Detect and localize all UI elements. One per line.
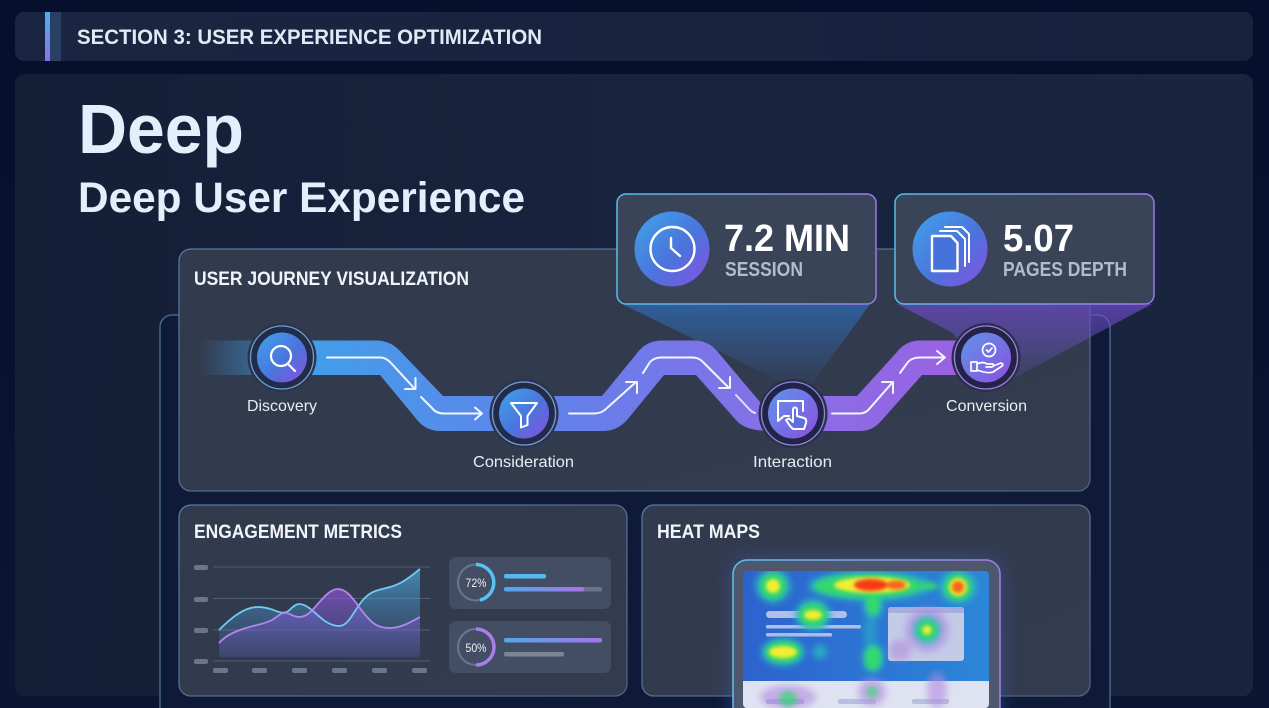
icon: clock [650, 227, 694, 271]
stat value: pages depth: 5.07 [1003, 218, 1074, 260]
heat blobs [755, 569, 977, 708]
percent: 72: 72% [466, 576, 487, 590]
lower page edge [0, 696, 1269, 708]
label: consideration: Consideration [473, 454, 574, 471]
node: conversion [946, 323, 1027, 415]
icon: magnifier [271, 346, 295, 371]
icon: pages [932, 227, 969, 271]
node: interaction [753, 379, 832, 471]
stat value: session: 7.2 MIN [724, 218, 850, 260]
node: discovery [247, 323, 317, 415]
percent: 50: 50% [466, 641, 487, 655]
label: discovery: Discovery [247, 398, 317, 415]
back panel [160, 315, 1110, 708]
stat label: session: SESSION [725, 259, 803, 281]
metric card: 72% [449, 557, 611, 609]
label: interaction: Interaction [753, 454, 832, 471]
heat map monitor [733, 560, 1000, 708]
metric card: 50% [449, 621, 611, 673]
stat card: session [617, 194, 876, 304]
stat card: pages depth [895, 194, 1154, 304]
journey ribbon [198, 340, 986, 431]
subtitle: Deep User Experience [78, 174, 525, 222]
icon: hand with check [971, 344, 1003, 373]
section heading: SECTION 3: USER EXPERIENCE OPTIMIZATION [77, 26, 542, 49]
icon: funnel [511, 403, 537, 428]
icon: touch screen [778, 401, 806, 429]
page mock content [766, 607, 964, 704]
section header bar [15, 12, 1253, 61]
journey arrows [327, 351, 945, 420]
panel heading: user journey: USER JOURNEY VISUALIZATION [194, 269, 469, 290]
panel: engagement metrics [179, 505, 627, 696]
title [78, 90, 525, 222]
label: conversion: Conversion [946, 398, 1027, 415]
title: Deep [78, 90, 244, 168]
monitor glow [733, 560, 1000, 708]
stat label: pages depth: PAGES DEPTH [1003, 259, 1127, 281]
area chart [194, 565, 430, 673]
callout connector: session [622, 304, 870, 384]
callout connector: pages depth [897, 304, 1152, 390]
panel: heat maps [642, 505, 1090, 696]
panel heading: heat maps: HEAT MAPS [657, 522, 760, 543]
node: consideration [473, 379, 574, 471]
panel heading: engagement: ENGAGEMENT METRICS [194, 522, 402, 543]
panel: user journey visualization [179, 249, 1090, 491]
